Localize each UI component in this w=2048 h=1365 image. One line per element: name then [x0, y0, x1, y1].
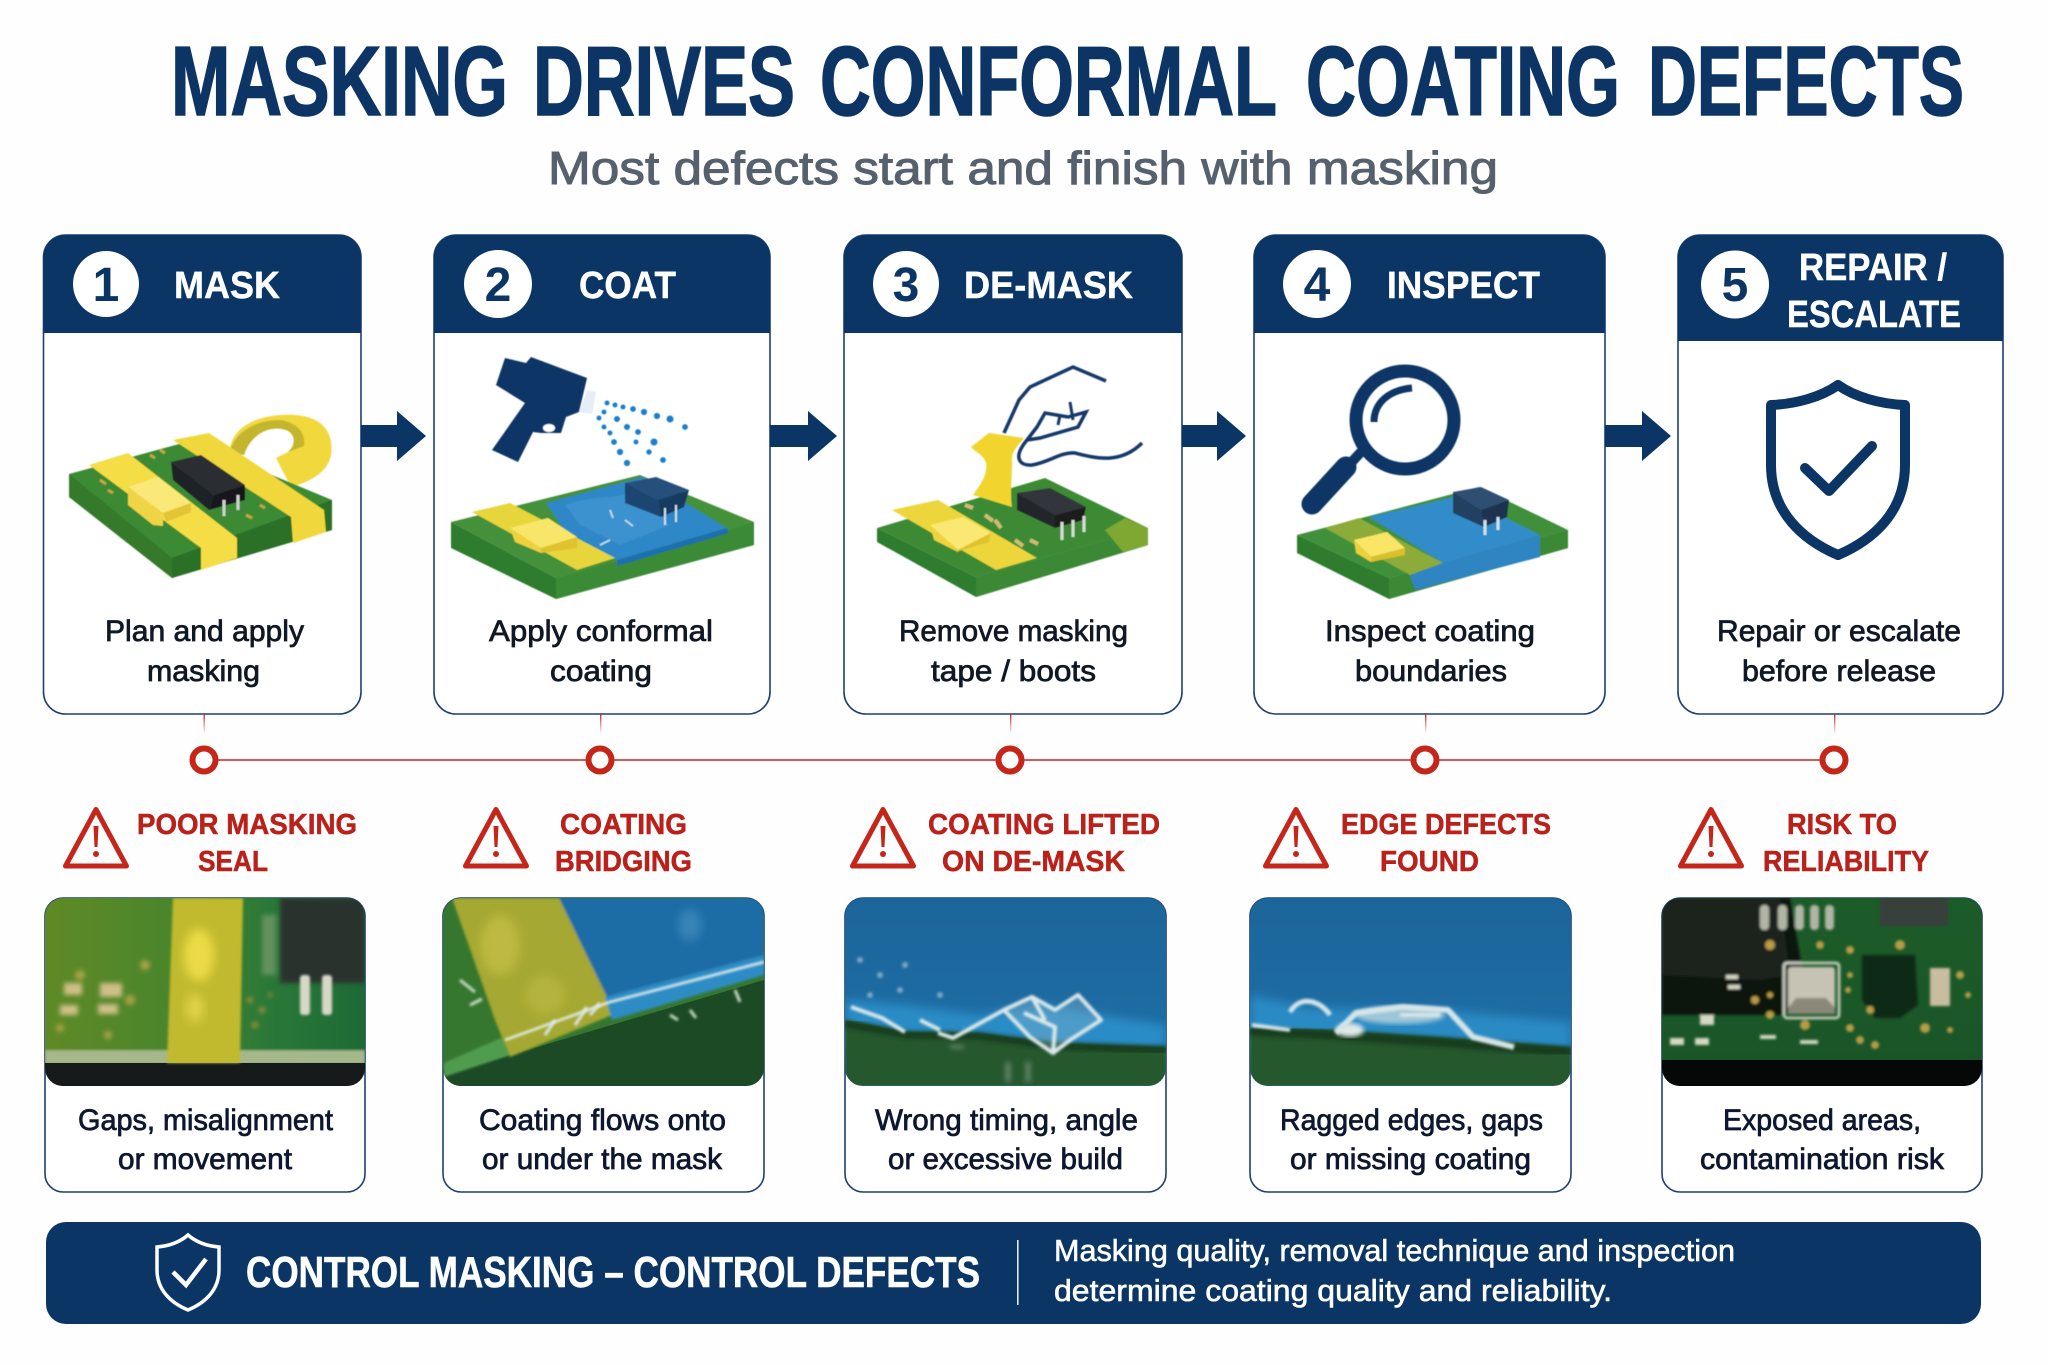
number badge 3: 3 [893, 259, 919, 312]
title: DRIVES [533, 26, 795, 136]
description 2 [489, 615, 713, 688]
title: MASKING [171, 26, 508, 136]
warning icon 1 [66, 810, 126, 866]
illustration: magnifier over PCB [1297, 371, 1568, 599]
footer message: Masking quality, removal technique and inspection [1054, 1233, 1735, 1268]
footer message: determine coating quality and reliability. [1054, 1273, 1612, 1308]
caption 5 [1700, 1104, 1945, 1176]
defect heading 1: POOR MASKING [137, 809, 357, 841]
step name 3: DE-MASK [964, 265, 1134, 307]
panel: defect 3 coating lifted [845, 809, 1166, 1192]
defect heading 3: COATING LIFTED [928, 809, 1160, 841]
defect heading 4: EDGE DEFECTS [1341, 809, 1551, 841]
number badge 4: 4 [1304, 259, 1331, 312]
number badge 4 [1283, 250, 1351, 318]
defect heading 2: BRIDGING [555, 846, 692, 878]
panel: defect 2 coating bridging [443, 809, 764, 1192]
step name 5: ESCALATE [1787, 294, 1961, 336]
illustration: peeling tape by hand [877, 367, 1148, 597]
defect heading 2 [555, 809, 692, 878]
footer banner [46, 1222, 1981, 1324]
number badge 5 [1701, 250, 1769, 318]
caption 2: Coating flows onto [479, 1104, 726, 1137]
description 2: Apply conformal [489, 615, 713, 648]
icon: small shield [157, 1235, 219, 1310]
footer headline: CONTROL MASKING – CONTROL DEFECTS [246, 1248, 980, 1297]
defect heading 5: RELIABILITY [1763, 846, 1929, 878]
panel: step 4 inspect [1254, 235, 1605, 714]
caption 4: Ragged edges, gaps [1280, 1104, 1543, 1137]
photo 3 lifted coating [845, 898, 1166, 1086]
description 4: boundaries [1355, 655, 1507, 688]
caption 1: or movement [118, 1143, 293, 1176]
caption 1: Gaps, misalignment [78, 1104, 334, 1137]
title [171, 26, 1964, 136]
header bar 1 [44, 235, 361, 333]
number badge 1: 1 [93, 259, 119, 312]
caption 5: Exposed areas, [1723, 1104, 1921, 1137]
description 5 [1717, 615, 1961, 688]
description 1: masking [147, 655, 260, 688]
icon: shield with check [1771, 385, 1905, 555]
caption 3: or excessive build [888, 1143, 1123, 1176]
header bar 5 [1678, 235, 2003, 341]
step name 4: INSPECT [1387, 265, 1540, 307]
description 3 [899, 615, 1128, 688]
defect heading 2: COATING [560, 809, 687, 841]
caption 1 [78, 1104, 334, 1176]
description 4 [1325, 615, 1535, 688]
header bar 4 [1254, 235, 1605, 333]
defect heading 3: ON DE-MASK [942, 846, 1125, 878]
caption 4 [1280, 1104, 1543, 1176]
panel: defect 1 poor masking seal [45, 809, 365, 1192]
panel: step 2 coat [434, 235, 770, 714]
title: COATING [1306, 26, 1620, 136]
panel: defect 4 edge defects [1250, 809, 1571, 1192]
caption 4: or missing coating [1290, 1143, 1531, 1176]
number badge 3 [873, 251, 939, 317]
description 1: Plan and apply [105, 615, 304, 648]
description 2: coating [550, 655, 652, 688]
panel: step 5 repair or escalate [1678, 235, 2003, 714]
defect heading 3 [928, 809, 1160, 878]
step name 5: REPAIR / [1799, 247, 1947, 289]
arrow 1 to 2 [361, 411, 426, 461]
illustration: masked PCB [69, 415, 332, 578]
caption 2: or under the mask [482, 1143, 723, 1176]
description 3: Remove masking [899, 615, 1128, 648]
photo 1 tape on PCB [45, 898, 365, 1086]
number badge 1 [73, 251, 139, 317]
panel: step 3 de-mask [844, 235, 1182, 714]
header bar 2 [434, 235, 770, 333]
caption 3: Wrong timing, angle [875, 1104, 1138, 1137]
defect heading 4: FOUND [1380, 846, 1479, 878]
warning icon 2 [466, 810, 526, 866]
panel: step 1 mask [44, 235, 361, 714]
description 4: Inspect coating [1325, 615, 1535, 648]
timeline connector [192, 714, 1846, 772]
step name 2: COAT [579, 265, 676, 307]
number badge 5: 5 [1722, 259, 1748, 312]
caption 5: contamination risk [1700, 1143, 1945, 1176]
caption 2 [479, 1104, 726, 1176]
defect heading 5: RISK TO [1787, 809, 1897, 841]
arrow 2 to 3 [770, 411, 837, 461]
illustration: spray gun and coated PCB [451, 357, 754, 599]
caption 3 [875, 1104, 1138, 1176]
number badge 2: 2 [485, 259, 511, 312]
photo 5 exposed PCB [1662, 898, 1982, 1086]
number badge 2 [464, 250, 532, 318]
defect heading 1 [137, 809, 357, 878]
defect heading 4 [1341, 809, 1551, 878]
title: CONFORMAL [820, 26, 1277, 136]
header bar 3 [844, 235, 1182, 333]
description 1 [105, 615, 304, 688]
warning icon 3 [852, 810, 914, 866]
description 5: Repair or escalate [1717, 615, 1961, 648]
photo 2 coating bridging over tape [443, 898, 764, 1086]
defect heading 5 [1763, 809, 1929, 878]
defect heading 1: SEAL [198, 846, 268, 878]
warning icon 4 [1266, 810, 1326, 866]
step name 1: MASK [174, 265, 281, 307]
subtitle: Most defects start and finish with masking [548, 142, 1498, 194]
description 3: tape / boots [931, 655, 1096, 688]
arrow 4 to 5 [1605, 411, 1671, 461]
panel: defect 5 risk to reliability [1662, 809, 1982, 1192]
description 5: before release [1742, 655, 1936, 688]
arrow 3 to 4 [1182, 411, 1246, 461]
warning icon 5 [1680, 810, 1742, 866]
footer message [1054, 1233, 1735, 1308]
step name 5 [1787, 247, 1961, 336]
photo 4 ragged edges [1250, 898, 1571, 1086]
